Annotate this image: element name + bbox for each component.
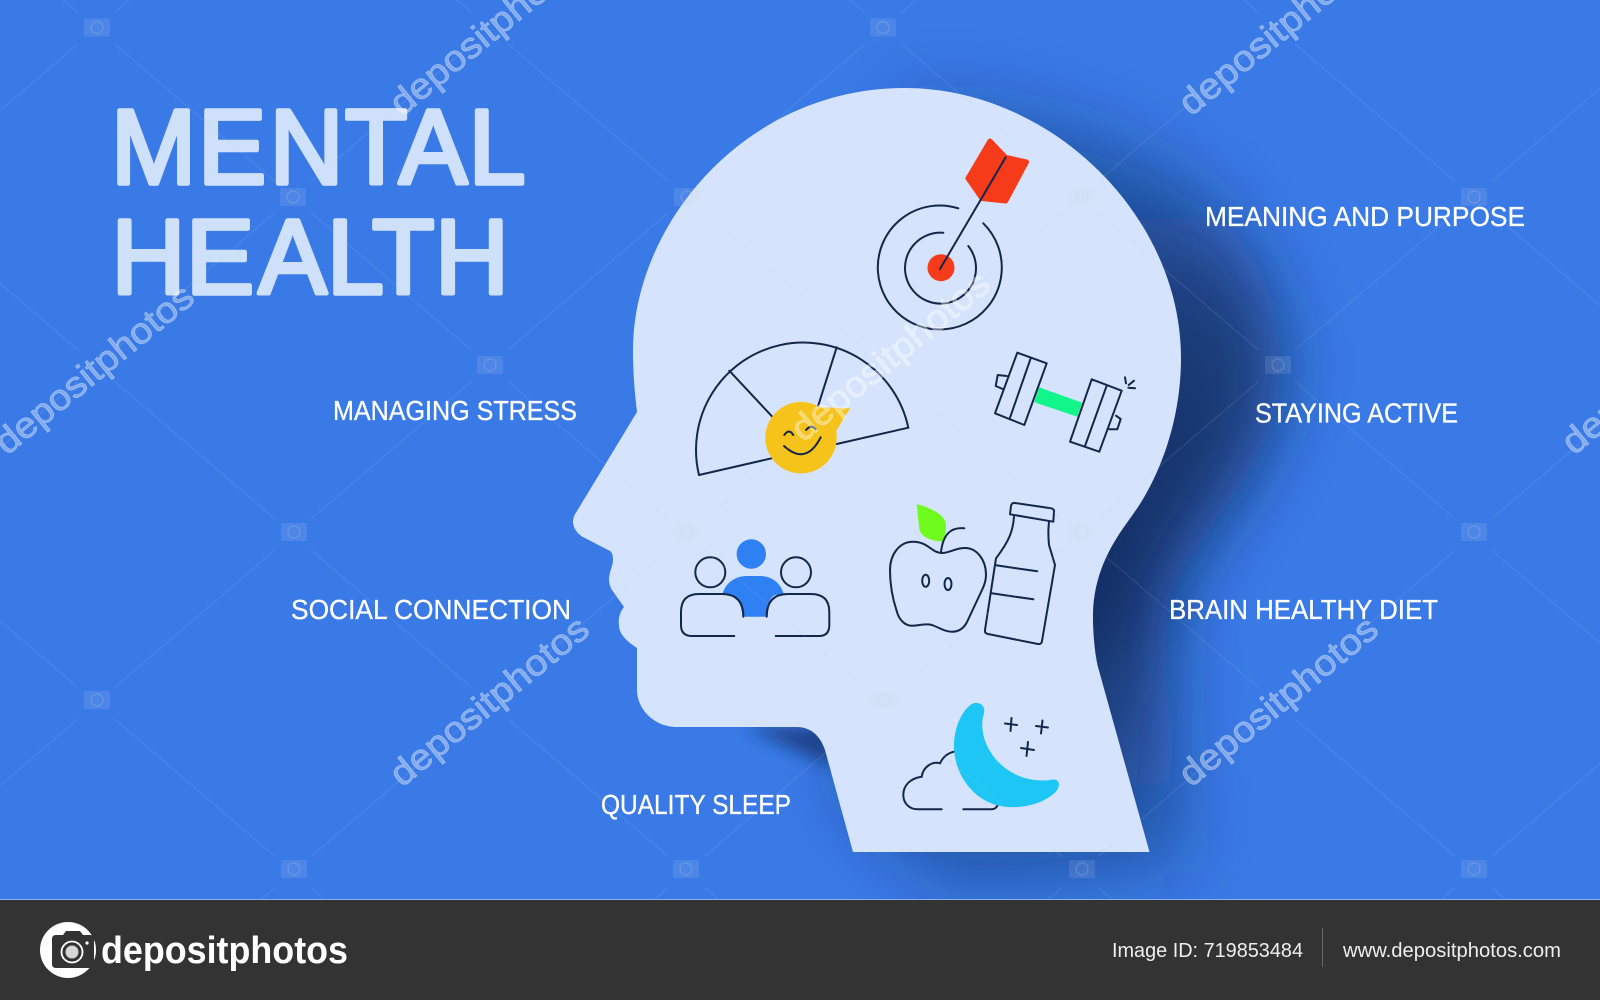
watermark text: depositphotos xyxy=(1170,607,1386,794)
title: MENTAL xyxy=(111,89,526,207)
icon: stress gauge with smiley xyxy=(696,343,908,475)
title: HEALTH xyxy=(111,199,509,317)
icon: dumbbell xyxy=(995,353,1135,452)
icon: moon, cloud and stars xyxy=(903,703,1059,809)
watermark text xyxy=(0,0,1600,794)
footer image id: Image ID: 719853484 xyxy=(1112,939,1303,962)
head silhouette xyxy=(573,88,1181,852)
head shadow xyxy=(745,90,1280,900)
label: brain healthy diet: BRAIN HEALTHY DIET xyxy=(1169,594,1438,625)
label: staying active: STAYING ACTIVE xyxy=(1255,398,1458,428)
label: meaning and purpose: MEANING AND PURPOSE xyxy=(1205,201,1525,232)
icon: social group xyxy=(681,539,829,636)
icon: apple and milk bottle xyxy=(890,503,1055,644)
label: quality sleep: QUALITY SLEEP xyxy=(601,789,791,820)
footer logo wordmark: depositphotos xyxy=(101,930,348,972)
footer logo mark xyxy=(40,922,96,978)
icon: target and arrow xyxy=(878,141,1026,329)
footer bar xyxy=(0,899,1600,1000)
footer website: www.depositphotos.com xyxy=(1342,939,1561,962)
label: managing stress: MANAGING STRESS xyxy=(333,395,577,426)
watermark text: depositphotos xyxy=(381,607,597,794)
watermark camera marks xyxy=(84,18,1487,878)
label: social connection: SOCIAL CONNECTION xyxy=(291,594,571,625)
title xyxy=(111,89,526,317)
watermark text: depositphotos xyxy=(782,262,998,449)
footer divider xyxy=(1322,928,1323,967)
